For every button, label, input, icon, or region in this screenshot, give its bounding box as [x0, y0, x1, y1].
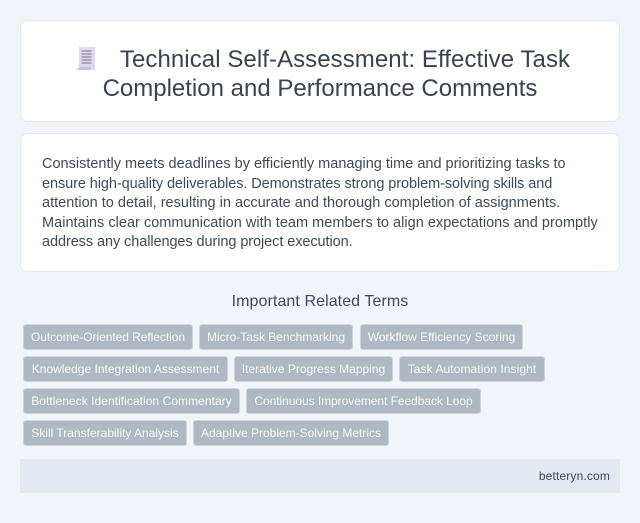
chip: [399, 356, 545, 382]
icon: document scroll: [76, 47, 96, 70]
chip: [360, 324, 523, 350]
chip: Skill Transferability Analysis: [31, 426, 179, 440]
chip: Workflow Efficiency Scoring: [368, 330, 515, 344]
chip: Continuous Improvement Feedback Loop: [254, 394, 473, 408]
chip: [193, 420, 389, 446]
heading: title: Completion and Performance Comments: [103, 74, 537, 102]
chip: [23, 356, 228, 382]
heading: title: Technical Self-Assessment: Effective Task: [120, 46, 570, 72]
chip: Task Automation Insight: [408, 362, 536, 376]
text block: description: attention to detail, resulting in accurate and thorough completion of assignments.: [42, 195, 560, 211]
chip: Adaptive Problem-Solving Metrics: [201, 426, 381, 440]
text block: description: ensure high-quality deliverables. Demonstrates strong problem-solving skills and: [42, 176, 552, 192]
text block: description: Maintains clear communication with team members to align expectations and promptly: [42, 215, 598, 231]
heading: title: [103, 46, 570, 102]
text block: description: address any challenges during project execution.: [42, 234, 353, 250]
chip: Micro-Task Benchmarking: [207, 330, 345, 344]
text block: description: Consistently meets deadlines by efficiently managing time and prioritizing tasks to: [42, 156, 566, 172]
chip: [23, 388, 240, 414]
chip: Bottleneck Identification Commentary: [31, 394, 232, 408]
panel: description card: [20, 133, 620, 272]
footer text: source: betteryn.com: [539, 469, 610, 483]
heading: related terms: Important Related Terms: [232, 293, 408, 310]
chip: [199, 324, 353, 350]
chip group: related terms: [23, 324, 545, 446]
chip: Outcome-Oriented Reflection: [31, 330, 185, 344]
panel: title card: [20, 20, 620, 122]
chip: [234, 356, 393, 382]
chip: Iterative Progress Mapping: [242, 362, 385, 376]
footer bar: [20, 459, 620, 493]
chip: Knowledge Integration Assessment: [32, 362, 219, 376]
chip: [23, 324, 193, 350]
text block: description: [42, 156, 598, 250]
chip: [23, 420, 187, 446]
chip: [246, 388, 481, 414]
